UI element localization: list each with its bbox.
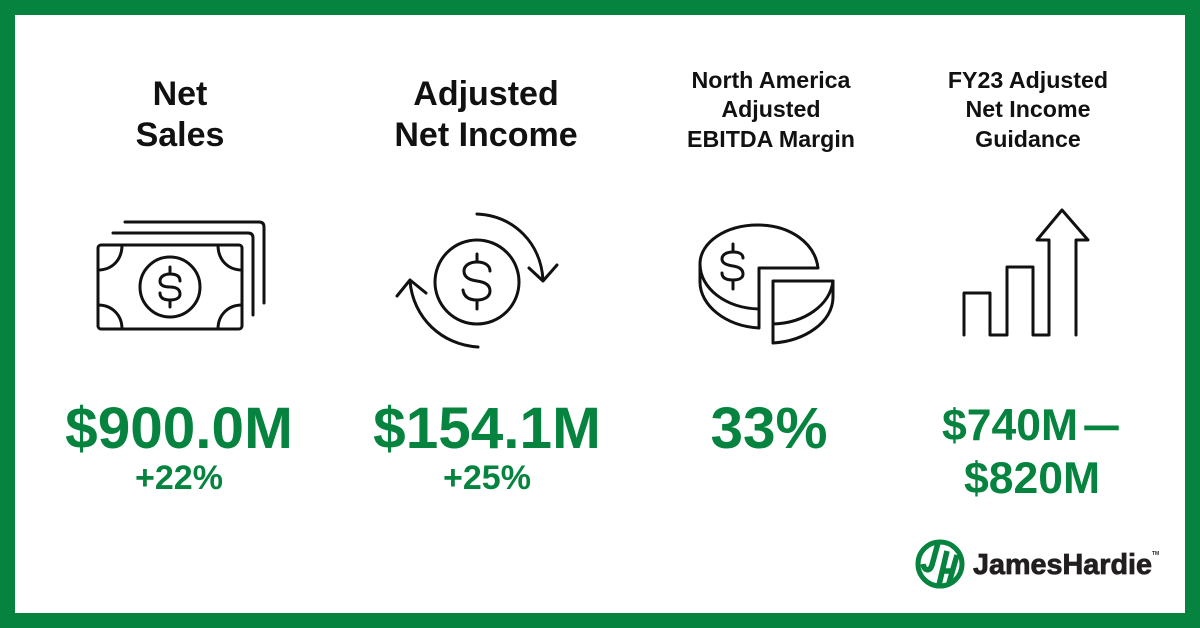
heading: fy23 guidance: Guidance [975, 126, 1081, 152]
heading: north america margin: North America [692, 67, 852, 93]
logo mark [918, 542, 962, 586]
icon: banknotes [98, 222, 264, 329]
heading: north america margin: Adjusted [721, 96, 821, 122]
value: guidance range: — [1085, 407, 1118, 444]
panel: adjusted net income [373, 75, 601, 497]
heading: north america margin: EBITDA Margin [687, 126, 855, 152]
panel: net sales [65, 75, 293, 497]
value: margin: 33% [710, 396, 828, 461]
heading: adjusted net income: Net Income [394, 116, 578, 154]
icon: rising bars with arrow [964, 210, 1088, 335]
heading: adjusted net income: Adjusted [413, 75, 559, 113]
panel: north america margin [687, 67, 855, 461]
heading: net sales: Sales [136, 116, 224, 154]
value: guidance range: $820M [964, 454, 1100, 503]
change: adjusted net income: +25% [443, 459, 531, 497]
trademark: TM [1152, 551, 1159, 557]
panel: fy23 guidance [942, 67, 1118, 503]
heading: fy23 guidance: FY23 Adjusted [948, 67, 1108, 93]
heading: net sales: Net [153, 75, 207, 113]
icon: pie chart [700, 225, 833, 343]
icon: circular arrows around dollar [397, 214, 557, 347]
value: guidance range: $740M [942, 401, 1078, 450]
change: net sales: +22% [135, 459, 223, 497]
logo wordmark: JamesHardie [973, 549, 1152, 581]
logo: James Hardie [918, 542, 1159, 586]
value: adjusted net income: $154.1M [373, 396, 601, 461]
value: net sales: $900.0M [65, 396, 293, 461]
heading: fy23 guidance: Net Income [966, 96, 1091, 122]
